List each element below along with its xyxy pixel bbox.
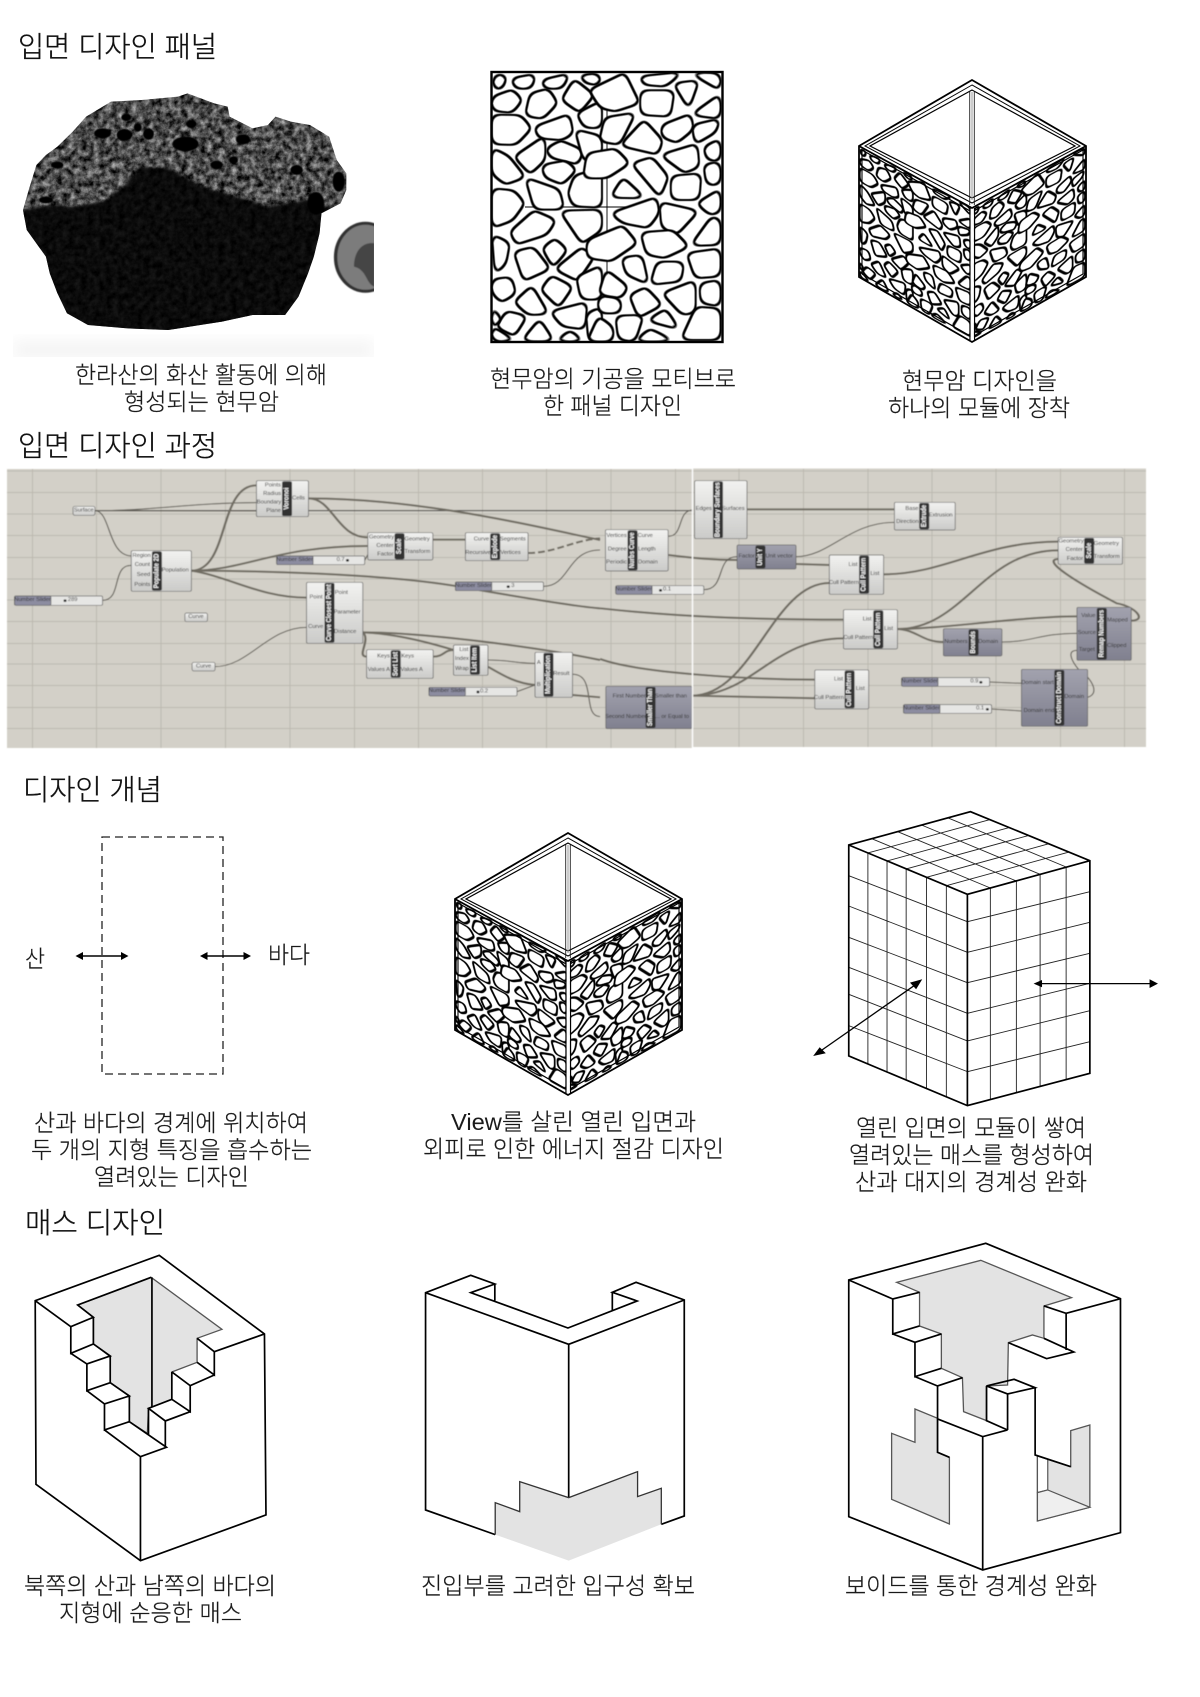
node: Voronoi: Voronoi bbox=[283, 487, 291, 510]
node: Remap Numbers bbox=[1077, 607, 1131, 660]
node: Nurbs Curve: Degree bbox=[608, 547, 627, 552]
node: Multiplication: A bbox=[537, 661, 541, 666]
node: Unit Y bbox=[737, 545, 796, 569]
module cube: open facade bbox=[455, 833, 682, 1095]
caption: mass 1 bbox=[24, 1573, 276, 1626]
node: Remap Numbers: Target bbox=[1079, 648, 1095, 653]
photo: basalt rock with coin bbox=[23, 93, 374, 353]
caption: stacked modules: 열린 입면의 모듈이 쌓여 bbox=[856, 1115, 1086, 1141]
diagram: site boundary between mountain and sea bbox=[25, 837, 310, 1074]
node: Curve Closest Point: Point bbox=[335, 590, 348, 596]
nodes: second half of the graph bbox=[605, 481, 1131, 729]
heading: 매스 디자인: 매스 디자인 bbox=[25, 1208, 165, 1240]
node: Extrude bbox=[894, 502, 955, 530]
node: Cull Pattern A bbox=[829, 555, 884, 594]
node: Scale: Geometry bbox=[369, 535, 394, 540]
node: Scale output: Factor bbox=[1067, 556, 1083, 562]
node: Scale output: Geometry bbox=[1059, 539, 1084, 544]
node: Number Slider 0.7: 0.7 bbox=[337, 557, 345, 563]
node: Nurbs Curve: Vertices bbox=[606, 534, 627, 539]
node: Construct Domain bbox=[1021, 669, 1088, 726]
caption: panel: 한 패널 디자인 bbox=[543, 393, 682, 419]
node: Remap Numbers: Remap Numbers bbox=[1098, 610, 1106, 657]
node: Bounds bbox=[943, 629, 1002, 656]
node: Smaller Than: Second Number bbox=[605, 714, 647, 720]
node: Bounds: Domain bbox=[978, 639, 998, 645]
caption: mass 3: 보이드를 통한 경계성 완화 bbox=[845, 1573, 1097, 1599]
node: Populate 2D bbox=[131, 551, 191, 591]
caption: stacked modules: 열려있는 매스를 형성하여 bbox=[849, 1142, 1094, 1168]
node: Nurbs Curve: Curve bbox=[638, 534, 653, 539]
node: Cull Pattern C bbox=[814, 670, 869, 709]
node: Scale: Scale bbox=[396, 538, 403, 554]
node: Curve parameter A bbox=[185, 613, 207, 622]
node: Number Slider 3: 3 bbox=[511, 583, 514, 589]
node: Extrude: Direction bbox=[896, 519, 919, 525]
label: sea: 바다 bbox=[268, 942, 310, 968]
node: Scale: Transform bbox=[405, 550, 431, 555]
node: Scale: Factor bbox=[377, 552, 394, 557]
node: Remap Numbers: Clipped bbox=[1107, 644, 1126, 649]
caption: panel: 현무암의 기공을 모티브로 bbox=[490, 366, 736, 392]
node: Scale output: Scale bbox=[1085, 542, 1093, 558]
mass diagram 3: voids bbox=[849, 1243, 1120, 1570]
node: Remap Numbers: Source bbox=[1078, 631, 1096, 636]
node: Surface parameter: Surface bbox=[74, 508, 94, 513]
node: Scale bbox=[368, 533, 433, 560]
caption: stacked modules: 산과 대지의 경계성 완화 bbox=[855, 1169, 1087, 1195]
node: Construct Domain: Domain end bbox=[1024, 708, 1054, 714]
arrow: right double bbox=[200, 952, 251, 960]
node: Sort List bbox=[367, 650, 433, 678]
node: Smaller Than: ... or Equal to bbox=[655, 714, 689, 720]
node: Number Slider 3: Number Slider bbox=[455, 583, 492, 589]
node: Voronoi: Plane bbox=[266, 508, 281, 514]
node: Extrude: Extrude bbox=[920, 504, 928, 527]
node: Scale output: Geometry bbox=[1094, 541, 1119, 547]
heading: 입면 디자인 과정: 입면 디자인 과정 bbox=[18, 431, 217, 463]
caption: stacked modules bbox=[849, 1115, 1094, 1195]
node: Boundary Surfaces: Surfaces bbox=[722, 506, 745, 512]
node: Voronoi: Points bbox=[265, 483, 281, 488]
caption: module: 현무암 디자인을 bbox=[902, 368, 1057, 394]
node: List Item: List bbox=[459, 647, 469, 653]
node: Explode: Vertices bbox=[500, 550, 521, 556]
node: Boundary Surfaces: Boundary Surfaces bbox=[714, 482, 722, 537]
node: Curve parameter B: Curve bbox=[196, 664, 211, 669]
node: Bounds: Numbers bbox=[944, 639, 968, 645]
node: Voronoi bbox=[256, 481, 308, 517]
node: Cull Pattern A: List bbox=[849, 562, 858, 568]
node: Construct Domain: Domain start bbox=[1021, 681, 1054, 686]
node: List Item: Index bbox=[455, 657, 469, 662]
node: Boundary Surfaces bbox=[695, 481, 747, 539]
node: Curve Closest Point: Parameter bbox=[334, 610, 361, 615]
node: Number Slider 0.1 bbox=[615, 586, 704, 594]
node: Multiplication: Multiplication bbox=[545, 655, 552, 694]
node: Curve parameter A: Curve bbox=[188, 614, 204, 620]
node: Curve Closest Point bbox=[307, 582, 363, 643]
caption: panel bbox=[490, 366, 736, 419]
node: Number Slider 0.1: Number Slider bbox=[615, 587, 652, 592]
mass diagram 2: entrance cut bbox=[426, 1275, 684, 1561]
caption: mass 1: 북쪽의 산과 남쪽의 바다의 bbox=[24, 1573, 276, 1599]
node: Number Slider 0.1 lower: Number Slider bbox=[903, 706, 940, 711]
node: Nurbs Curve: Nurbs Curve bbox=[629, 532, 636, 568]
node: Voronoi: Boundary bbox=[257, 500, 282, 505]
dashed site boundary bbox=[102, 837, 223, 1074]
heading: 입면 디자인 패널: 입면 디자인 패널 bbox=[18, 32, 217, 64]
node: Sort List: Sort List bbox=[392, 651, 399, 676]
label: mountain: 산 bbox=[25, 946, 45, 972]
node: Unit Y: Unit vector bbox=[765, 554, 793, 559]
node: Scale: Center bbox=[376, 543, 394, 549]
node: Cull Pattern B: Cull Pattern bbox=[875, 612, 882, 646]
node: Number Slider 0.1 lower bbox=[903, 705, 992, 713]
node: Cull Pattern C: List bbox=[834, 677, 843, 682]
node: Sort List: Values A bbox=[401, 667, 423, 673]
node: Multiplication: Result bbox=[553, 672, 570, 677]
module cube with panel pattern bbox=[859, 80, 1086, 342]
caption: open facade bbox=[423, 1109, 724, 1162]
node: Nurbs Curve: Length bbox=[638, 547, 656, 552]
node: Number Slider 0.1 lower: 0.1 bbox=[976, 706, 984, 711]
caption: open facade: View를 살린 열린 입면과 bbox=[451, 1109, 696, 1135]
caption: boundary concept: 열려있는 디자인 bbox=[94, 1164, 249, 1190]
arrow: left double bbox=[76, 952, 128, 960]
node: Cull Pattern A: Cull Pattern bbox=[829, 580, 859, 586]
node: Number Slider 0.9: Number Slider bbox=[901, 679, 938, 684]
caption: rock: 형성되는 현무암 bbox=[124, 389, 279, 415]
node: Unit Y: Unit Y bbox=[757, 548, 764, 566]
node: Cull Pattern B: List bbox=[863, 617, 872, 622]
wires bbox=[95, 485, 1139, 717]
node: Sort List: Keys bbox=[377, 654, 390, 659]
node: Bounds: Bounds bbox=[970, 631, 977, 653]
node: Cull Pattern C: Cull Pattern bbox=[846, 673, 853, 706]
caption: boundary concept bbox=[31, 1110, 312, 1190]
node: Curve parameter B bbox=[192, 662, 215, 671]
node: Multiplication: B bbox=[537, 682, 541, 688]
node: Curve Closest Point: Point bbox=[310, 595, 323, 600]
node: Nurbs Curve bbox=[605, 530, 668, 571]
node: Voronoi: Cells bbox=[292, 496, 305, 501]
node: Number Slider 0.1: 0.1 bbox=[663, 587, 671, 592]
caption: boundary concept: 산과 바다의 경계에 위치하여 bbox=[34, 1110, 308, 1136]
caption: open facade: 외피로 인한 에너지 절감 디자인 bbox=[423, 1136, 724, 1162]
node: Explode: Curve bbox=[474, 537, 489, 542]
node: Extrude: Extrusion bbox=[929, 513, 953, 518]
node: Explode: Segments bbox=[500, 537, 526, 542]
mass diagram 1: stepped void bbox=[35, 1255, 266, 1561]
node: Voronoi: Radius bbox=[263, 491, 281, 497]
node: Populate 2D: Population bbox=[162, 568, 189, 573]
node: Boundary Surfaces: Edges bbox=[696, 506, 712, 512]
node: Curve Closest Point: Curve bbox=[308, 625, 323, 630]
node: Number Slider 289: 289 bbox=[68, 598, 78, 603]
caption: mass 1: 지형에 순응한 매스 bbox=[59, 1600, 242, 1626]
node: Populate 2D: Region bbox=[133, 553, 151, 559]
node: Cull Pattern A: Cull Pattern bbox=[860, 558, 868, 591]
node: Cull Pattern B bbox=[843, 610, 897, 649]
node: Extrude: Base bbox=[905, 506, 919, 512]
node: Cull Pattern B: Cull Pattern bbox=[843, 636, 873, 641]
caption: rock: 한라산의 화산 활동에 의해 bbox=[75, 362, 327, 388]
node: Construct Domain: Domain bbox=[1064, 695, 1084, 700]
node: Number Slider 289 bbox=[14, 596, 103, 605]
node: Populate 2D: Points bbox=[134, 582, 151, 588]
node: Remap Numbers: Mapped bbox=[1107, 618, 1128, 623]
node: List Item bbox=[453, 645, 488, 675]
node: Number Slider 0.9 bbox=[901, 678, 990, 686]
node: Nurbs Curve: Domain bbox=[638, 560, 658, 565]
node: Number Slider 0.2 bbox=[429, 687, 517, 696]
node: Number Slider 0.9: 0.9 bbox=[970, 679, 978, 684]
caption: boundary concept: 두 개의 지형 특징을 흡수하는 bbox=[31, 1137, 312, 1163]
panel drawing: voronoi pore pattern bbox=[492, 72, 722, 342]
node: Sort List: Values A bbox=[368, 667, 390, 673]
node: Populate 2D: Populate 2D bbox=[153, 553, 161, 588]
node: Explode bbox=[465, 533, 528, 561]
node: Number Slider 0.7: Number Slider bbox=[276, 557, 313, 563]
heading: 디자인 개념: 디자인 개념 bbox=[23, 775, 162, 807]
node: Unit Y: Factor bbox=[739, 554, 755, 559]
node: List Item: List Item bbox=[471, 647, 479, 672]
node: Multiplication bbox=[535, 652, 573, 697]
node: Number Slider 0.7 bbox=[276, 556, 365, 565]
node: Populate 2D: Seed bbox=[137, 573, 150, 578]
node: Scale output: Center bbox=[1066, 548, 1083, 553]
node: Explode: Recursive bbox=[465, 550, 491, 556]
node: Number Slider 0.2: 0.2 bbox=[480, 689, 488, 694]
node: Cull Pattern A: List bbox=[870, 572, 880, 577]
node: Smaller Than: Smaller than bbox=[655, 694, 687, 699]
node: Scale: Geometry bbox=[405, 537, 430, 542]
node: List Item: Wrap bbox=[455, 666, 469, 672]
stacked module grid mass with arrows bbox=[813, 812, 1158, 1106]
node: Cull Pattern C: List bbox=[856, 687, 865, 692]
caption: rock bbox=[75, 362, 327, 415]
node: Construct Domain: Construct Domain bbox=[1056, 672, 1063, 724]
node: Curve Closest Point: Curve Closest Point bbox=[326, 583, 333, 641]
node: Nurbs Curve: Periodic bbox=[606, 560, 627, 565]
node: Smaller Than: Smaller Than bbox=[647, 688, 654, 726]
node: Surface parameter bbox=[73, 506, 95, 515]
node: Cull Pattern B: List bbox=[884, 626, 894, 632]
node: Scale output: Transform bbox=[1094, 554, 1120, 560]
node: Number Slider 289: Number Slider bbox=[14, 598, 51, 603]
panel: grasshopper node graph bbox=[7, 468, 1146, 749]
caption: mass 2: 진입부를 고려한 입구성 확보 bbox=[421, 1573, 695, 1599]
node: Remap Numbers: Value bbox=[1081, 614, 1096, 619]
node: Number Slider 3 bbox=[455, 582, 543, 591]
node: Populate 2D: Count bbox=[135, 563, 151, 568]
caption: module bbox=[888, 368, 1070, 421]
node: Sort List: Keys bbox=[401, 654, 414, 659]
node: Explode: Explode bbox=[491, 535, 499, 558]
node: Scale output bbox=[1058, 537, 1122, 564]
node: Number Slider 0.2: Number Slider bbox=[429, 689, 466, 694]
node: Cull Pattern C: Cull Pattern bbox=[814, 696, 844, 701]
node: Smaller Than: First Number bbox=[613, 694, 646, 699]
node: Smaller Than bbox=[605, 686, 692, 729]
caption: module: 하나의 모듈에 장착 bbox=[888, 395, 1070, 421]
node: Curve Closest Point: Distance bbox=[334, 630, 356, 635]
